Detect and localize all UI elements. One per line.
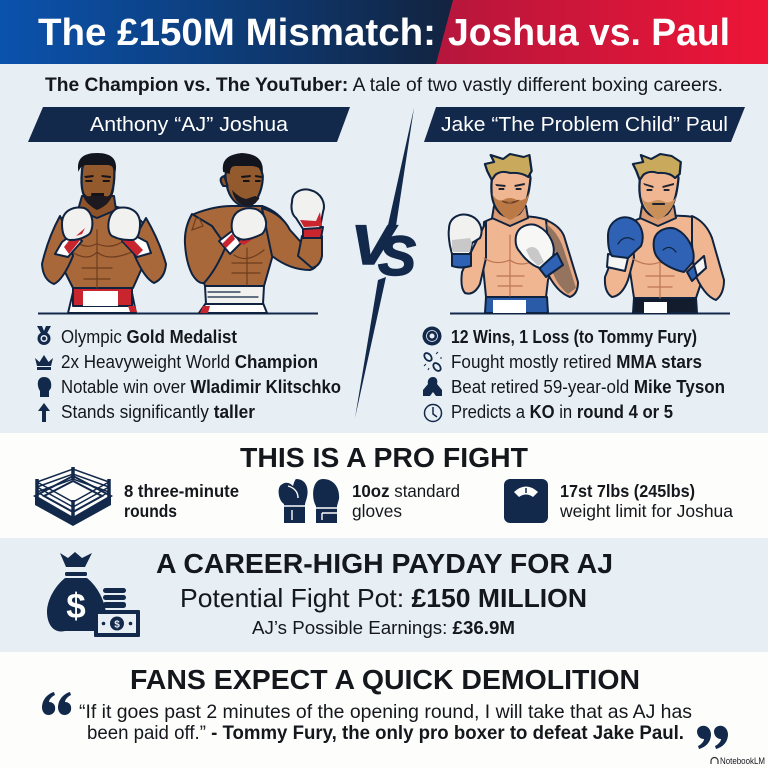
title <box>38 12 730 54</box>
text: potential fight pot: Potential Fight Pot: £150 MILLION <box>180 583 587 613</box>
icon: boxing gloves <box>279 479 339 523</box>
icon: money bag: $ <box>114 620 120 630</box>
text: Stands significantly taller: Stands significantly taller <box>61 402 255 422</box>
text: rounds: rounds <box>124 501 177 521</box>
text: weight limit: 17st 7lbs (245lbs) <box>560 481 695 501</box>
illustration: Paul smiling stance <box>449 154 578 313</box>
text: possible earnings: AJ’s Possible Earnings: £36.9M <box>252 618 515 638</box>
VS divider: V <box>351 213 398 276</box>
heading: career-high payday: A CAREER-HIGH PAYDAY FOR AJ <box>156 548 613 579</box>
text: gloves: 10oz standard <box>352 481 460 501</box>
icon: clock <box>424 404 442 422</box>
heading: Joshua name banner: Anthony “AJ” Joshua <box>90 114 289 136</box>
Paul baseline <box>450 312 730 314</box>
icon: money bag <box>47 552 140 637</box>
text: Predicts a KO in round 4 or 5: Predicts a KO in round 4 or 5 <box>451 402 673 422</box>
text: 12 Wins, 1 Loss (to Tommy Fury): 12 Wins, 1 Loss (to Tommy Fury) <box>451 327 697 347</box>
heading: Paul name banner <box>424 107 745 142</box>
heading: this is a pro fight: THIS IS A PRO FIGHT <box>240 442 528 473</box>
text: quote line two: been paid off.” - Tommy Fury, the only pro boxer to defeat Jake Paul. <box>87 722 684 744</box>
title: The £150M Mismatch: <box>38 12 436 54</box>
illustration: Joshua side stance <box>185 153 324 313</box>
icon: crown <box>35 355 53 370</box>
icon: boxer <box>423 377 442 396</box>
heading: Paul name banner: Jake “The Problem Child” Paul <box>441 114 728 136</box>
text: quote line one: “If it goes past 2 minutes of the opening round, I will take that as AJ has <box>79 701 692 723</box>
icon: money bag: $ <box>66 587 86 626</box>
illustration: Joshua guard stance <box>42 153 166 313</box>
icon: medal <box>37 326 51 345</box>
list: Paul record <box>422 326 725 422</box>
icon: record disc <box>422 326 442 346</box>
Joshua baseline <box>38 312 318 314</box>
subtitle: The Champion vs. The YouTuber: A tale of two vastly different boxing careers. <box>45 75 723 96</box>
text: gloves <box>352 481 460 521</box>
icon: broken chain <box>423 352 442 372</box>
icon: opening quote <box>42 692 71 715</box>
icon: closing quote <box>697 726 728 749</box>
panel: header banner <box>0 0 768 64</box>
text: Olympic Gold Medalist: Olympic Gold Medalist <box>61 327 237 347</box>
text: 2x Heavyweight World Champion: 2x Heavyweight World Champion <box>61 352 318 372</box>
list: Joshua achievements <box>35 326 341 422</box>
text: Notable win over Wladimir Klitschko: Notable win over Wladimir Klitschko <box>61 377 341 397</box>
VS divider <box>351 108 416 418</box>
heading: Joshua name banner <box>28 107 350 142</box>
icon: boxing glove <box>38 377 51 397</box>
text: weight limit: weight limit for Joshua <box>559 501 733 521</box>
icon: up arrow <box>38 403 50 422</box>
panel: comparison background <box>0 64 768 433</box>
heading: fans expect a quick demolition: FANS EXPECT A QUICK DEMOLITION <box>130 664 640 695</box>
icon: boxing ring <box>35 467 111 526</box>
panel: payday background <box>0 538 768 652</box>
text: rounds: 8 three-minute <box>124 481 239 501</box>
text: Fought mostly retired MMA stars: Fought mostly retired MMA stars <box>451 352 702 372</box>
text: Beat retired 59-year-old Mike Tyson: Beat retired 59-year-old Mike Tyson <box>451 377 725 397</box>
illustration: Paul serious stance <box>605 154 724 313</box>
title: Joshua vs. Paul <box>448 12 730 54</box>
text: weight limit <box>559 481 733 521</box>
icon: weighing scale <box>504 479 548 523</box>
VS divider: S <box>378 224 416 287</box>
text: rounds <box>124 481 239 521</box>
text: gloves: gloves <box>352 501 402 521</box>
